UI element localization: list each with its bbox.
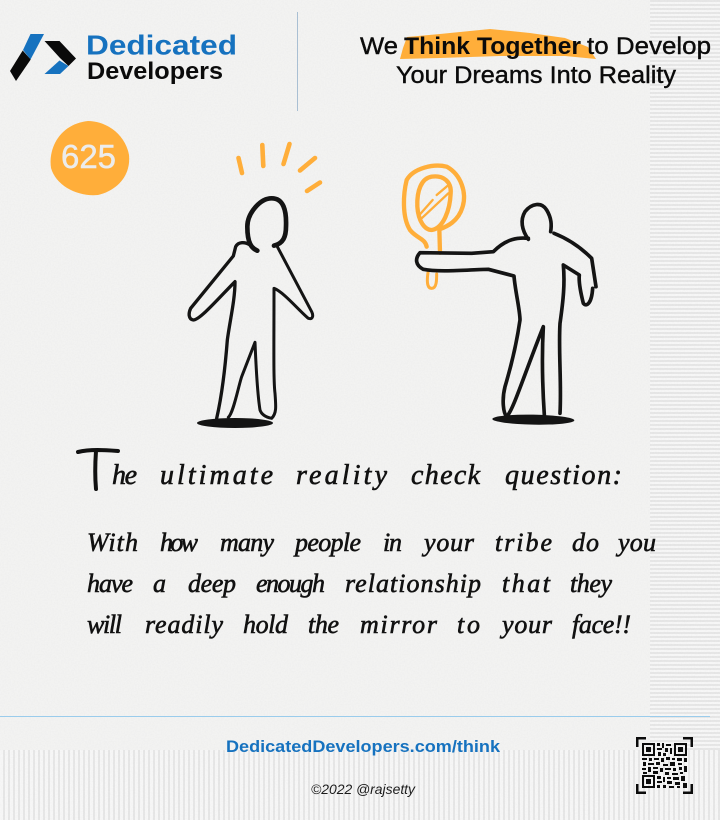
line 3: readily	[145, 610, 223, 639]
line 2: enough	[256, 569, 325, 598]
line 3: face!!	[572, 610, 631, 639]
line 2: they	[570, 569, 612, 598]
line 3: the	[308, 610, 339, 639]
shadow	[197, 418, 273, 428]
footer link: DedicatedDevelopers.com/think	[226, 737, 501, 756]
line 2: a	[153, 569, 166, 598]
line 1: many	[220, 528, 274, 557]
body and arm	[417, 238, 544, 417]
heading: reality check: he	[112, 460, 137, 491]
figure: person looking at mirror	[189, 198, 313, 428]
line 3: will	[87, 610, 122, 639]
shadow	[492, 414, 574, 425]
logo: Dedicated Developers	[10, 30, 237, 85]
highlighted phrase: Think Together	[404, 33, 581, 60]
heading: reality check: ultimate	[160, 460, 273, 491]
line 1	[87, 528, 656, 557]
mirror shine	[419, 186, 448, 218]
legs and right arm	[228, 247, 313, 418]
line 2: that	[502, 569, 551, 598]
line 1: With	[87, 528, 138, 557]
mirror handle behind hand	[427, 271, 437, 288]
line 3: hold	[243, 610, 289, 639]
tagline line 2: Your Dreams Into Reality	[396, 62, 676, 89]
line 2: relationship	[345, 569, 481, 598]
heading: reality check	[78, 450, 622, 491]
big T	[78, 450, 118, 489]
line 1: people	[293, 528, 361, 557]
logo wordmark top: Dedicated	[86, 30, 237, 60]
tagline	[360, 29, 711, 89]
line 3: your	[499, 610, 553, 639]
line 2: deep	[188, 569, 236, 598]
mirror glass	[417, 176, 451, 230]
brush highlight	[400, 29, 596, 59]
line 2: have	[87, 569, 133, 598]
line 1: how	[160, 528, 199, 557]
head	[522, 205, 551, 239]
badge: 625	[51, 121, 129, 195]
line 3	[87, 610, 631, 639]
head	[247, 198, 286, 251]
mirror frame	[404, 166, 464, 253]
icon: orange idea rays	[238, 144, 320, 191]
body text	[87, 528, 656, 639]
icon: QR code	[636, 737, 693, 794]
back leg and arm	[554, 233, 596, 413]
line 1: you	[615, 528, 656, 557]
line 3: mirror	[360, 610, 438, 639]
line 1: do	[572, 528, 599, 557]
heading: reality check: reality	[296, 460, 388, 491]
line 1: your	[421, 528, 475, 557]
copyright: ©2022 @rajsetty	[311, 781, 416, 797]
heading: reality check: question:	[505, 460, 622, 491]
line 2	[87, 569, 612, 598]
line 3: to	[457, 610, 480, 639]
figure: person holding mirror	[404, 166, 596, 425]
line 1: in	[383, 528, 402, 557]
badge: 625: 625	[61, 138, 116, 175]
heading: reality check: check	[411, 460, 481, 491]
line 1: tribe	[495, 528, 552, 557]
logo wordmark bottom: Developers	[87, 58, 223, 85]
body	[189, 243, 250, 418]
tagline line 1 end: to Develop	[587, 33, 711, 60]
icon: logo mark	[10, 34, 76, 81]
tagline line 1: We	[360, 33, 398, 60]
